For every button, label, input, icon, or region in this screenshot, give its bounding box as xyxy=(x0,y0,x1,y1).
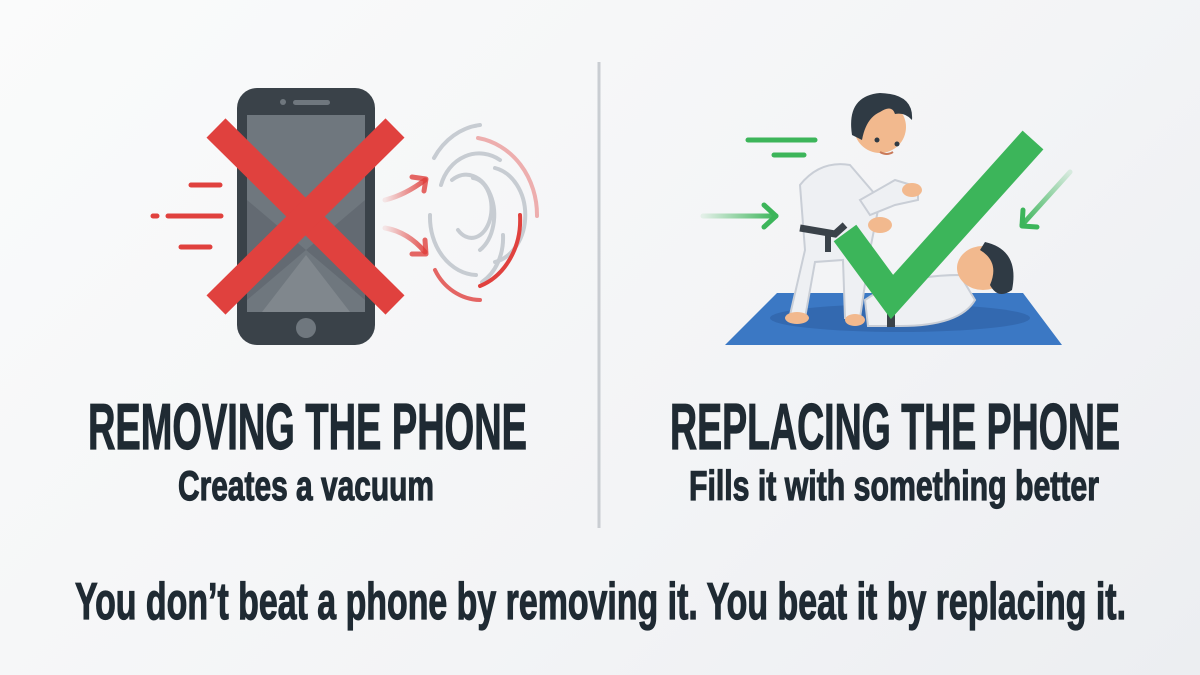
phone body xyxy=(237,88,375,345)
lying person xyxy=(865,242,1013,327)
illustration: judo replacement xyxy=(703,93,1070,345)
divider xyxy=(598,62,600,528)
speed lines green xyxy=(748,140,815,155)
mat xyxy=(725,293,1062,345)
arrow left xyxy=(703,205,776,227)
arrow right diagonal xyxy=(1022,172,1070,227)
left subtitle: Creates a vacuum xyxy=(178,462,434,509)
vacuum swirl xyxy=(430,125,537,300)
red X xyxy=(216,128,395,305)
speed lines xyxy=(153,185,221,247)
icon: crossed out phone xyxy=(153,88,537,345)
arrows to swirl xyxy=(385,180,425,252)
left heading: REMOVING THE PHONE xyxy=(88,390,527,463)
standing kid xyxy=(785,93,922,326)
green checkmark xyxy=(845,140,1033,297)
